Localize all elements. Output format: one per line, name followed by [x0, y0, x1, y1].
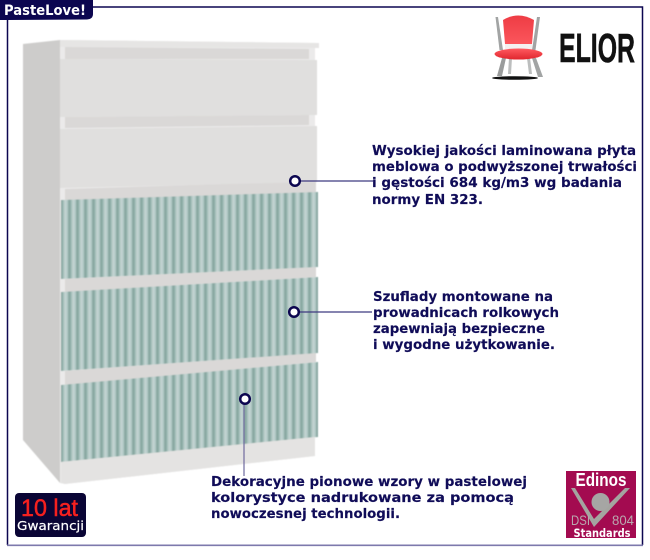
- text: decorative pattern: nowoczesnej technologii.: [211, 507, 400, 522]
- text: decorative pattern: kolorystyce nadrukowane za pomocą: [211, 491, 514, 506]
- badge: Edinos DSI 804 Standards: [566, 470, 636, 540]
- text: laminated board: meblowa o podwyższonej trwałości: [372, 160, 637, 175]
- text: laminated board: i gęstości 684 kg/m3 wg badania: [372, 176, 622, 191]
- dresser top board: [60, 40, 319, 48]
- badge: 10 years warranty: Gwarancji: [17, 519, 84, 533]
- badge: Edinos DSI 804 Standards: Standards: [574, 526, 631, 540]
- dresser: [23, 40, 319, 484]
- text: laminated board: [372, 144, 637, 208]
- dresser plinth: [61, 437, 315, 484]
- text: drawer runners: prowadnicach rolkowych: [373, 306, 559, 321]
- second drawer: [60, 126, 317, 188]
- text: decorative pattern: Dekoracyjne pionowe wzory w pastelowej: [211, 475, 527, 490]
- text: drawer runners: i wygodne użytkowanie.: [373, 338, 555, 353]
- badge: Edinos DSI 804 Standards: Edinos: [576, 470, 626, 490]
- top drawer: [60, 59, 317, 117]
- badge: Edinos DSI 804 Standards: 804: [612, 513, 634, 528]
- dresser side panel: [23, 40, 60, 483]
- striped drawer 4: [61, 277, 318, 371]
- text: drawer runners: zapewniają bezpieczne: [373, 322, 545, 337]
- text: drawer runners: [373, 290, 559, 353]
- badge: Edinos DSI 804 Standards: DSI: [571, 513, 590, 528]
- text: drawer runners: Szuflady montowane na: [373, 290, 553, 305]
- drawer recess gaps: [65, 47, 316, 385]
- text: decorative pattern: [211, 475, 527, 522]
- badge: 10 years warranty: 10 lat: [21, 495, 78, 522]
- callout 3 marker and leader: [240, 394, 250, 476]
- icon: chair: [492, 16, 543, 80]
- badge: 10 years warranty: [15, 493, 86, 537]
- callout 1 marker and leader: [290, 176, 373, 186]
- text: laminated board: normy EN 323.: [372, 193, 483, 208]
- dresser front body: [60, 40, 319, 484]
- striped drawer 5: [61, 362, 318, 462]
- striped drawer 3: [61, 192, 318, 279]
- text: laminated board: Wysokiej jakości laminowana płyta: [372, 144, 636, 159]
- logo: Elior chair: [492, 16, 635, 80]
- brand tab: PasteLove!: PasteLove!: [4, 3, 86, 19]
- callout 2 marker and leader: [289, 307, 372, 317]
